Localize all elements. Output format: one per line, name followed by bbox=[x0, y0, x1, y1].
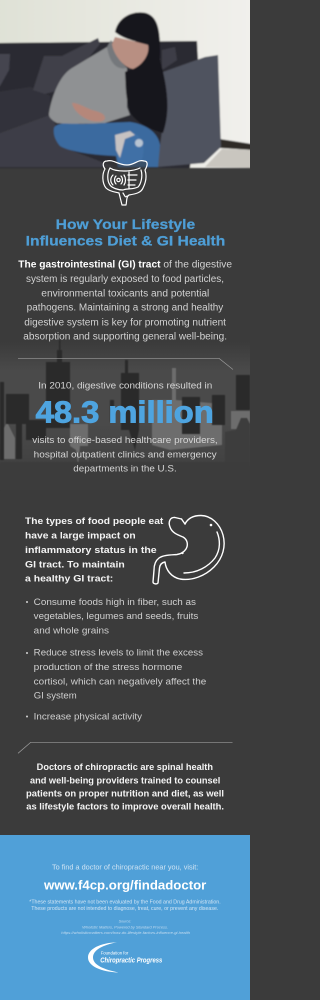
disclaimer bbox=[29, 899, 221, 912]
bullet: fiber bbox=[26, 597, 199, 636]
logo: Foundation for Chiropractic Progress bbox=[88, 942, 162, 972]
statistic block: departments in the U.S. bbox=[73, 464, 177, 475]
closing text block: patients on proper nutrition and diet, as well bbox=[26, 788, 224, 798]
lead text: food and inflammation: GI tract. To maintain bbox=[25, 559, 125, 570]
title bbox=[26, 216, 225, 249]
statistic block: hospital outpatient clinics and emergency bbox=[34, 449, 217, 460]
title: Influences Diet & GI Health bbox=[26, 233, 225, 249]
call to action text: To find a doctor of chiropractic near you, visit: bbox=[52, 863, 198, 872]
title: How Your Lifestyle bbox=[56, 216, 195, 232]
intro text block: environmental toxicants and potential bbox=[41, 288, 209, 299]
website url: www.f4cp.org/findadoctor bbox=[43, 877, 206, 892]
source bbox=[61, 920, 190, 935]
bullet list bbox=[26, 597, 206, 723]
lead text: food and inflammation bbox=[25, 516, 164, 585]
bullet: activity: Increase physical activity bbox=[34, 712, 142, 723]
statistic block: visits to office-based healthcare providers, bbox=[32, 435, 218, 446]
divider: lower bbox=[18, 742, 232, 753]
bullet: stress: GI system bbox=[34, 691, 77, 702]
closing text block: Doctors of chiropractic are spinal health bbox=[37, 762, 213, 772]
lead text: food and inflammation: a healthy GI tract: bbox=[25, 574, 113, 585]
intro text block: digestive system is key for promoting nutrient bbox=[24, 317, 226, 328]
bullet: stress bbox=[26, 648, 206, 702]
disclaimer: These products are not intended to diagnose, treat, cure, or prevent any disease. bbox=[31, 906, 218, 912]
bullet: stress: cortisol, which can negatively affect the bbox=[34, 676, 206, 687]
statistic block: In 2010, digestive conditions resulted in bbox=[38, 381, 212, 392]
bullet: fiber: vegetables, legumes and seeds, fruits bbox=[34, 611, 199, 622]
icon: intestines bbox=[103, 161, 147, 205]
bullet: stress: Reduce stress levels to limit the excess bbox=[34, 648, 203, 659]
logo: Foundation for Chiropractic Progress: Foundation for bbox=[101, 950, 129, 955]
icon: stomach bbox=[153, 516, 224, 584]
bullet: fiber: and whole grains bbox=[34, 625, 109, 636]
intro text block: The gastrointestinal (GI) tract of the digestive bbox=[18, 260, 233, 271]
bullet: stress: production of the stress hormone bbox=[34, 662, 182, 673]
infographic bbox=[0, 0, 250, 1000]
closing text block: as lifestyle factors to improve overall health. bbox=[26, 802, 224, 812]
closing text block: and well-being providers trained to counsel bbox=[30, 775, 220, 785]
source: Source: bbox=[119, 920, 131, 924]
closing text block bbox=[26, 762, 224, 812]
skyline illustration bbox=[0, 340, 250, 490]
statistic: 48.3 million: 48.3 million bbox=[36, 395, 214, 429]
photo: woman holding her stomach on a sofa bbox=[0, 0, 252, 168]
logo: Foundation for Chiropractic Progress: Chiropractic Progress bbox=[100, 956, 162, 965]
source: Wholistic Matters, Powered by Standard Process. bbox=[82, 925, 168, 929]
disclaimer: *These statements have not been evaluated by the Food and Drug Administration. bbox=[29, 899, 221, 905]
intro text block: system is regularly exposed to food particles, bbox=[26, 274, 224, 285]
intro text block: absorption and supporting general well-being. bbox=[23, 332, 227, 343]
panel: footer bbox=[0, 835, 250, 1000]
divider: upper bbox=[18, 358, 233, 370]
statistic block bbox=[32, 381, 218, 475]
lead text: food and inflammation: The types of food people eat bbox=[25, 516, 164, 527]
source: https://wholisticmatters.com/how-do-lifestyle-factors-influence-gi-health bbox=[61, 931, 190, 935]
panel: dark background bbox=[0, 167, 250, 835]
lead text: food and inflammation: inflammatory status in the bbox=[25, 545, 157, 556]
intro text block: pathogens. Maintaining a strong and healthy bbox=[27, 303, 223, 314]
bullet: fiber: Consume foods high in fiber, such as bbox=[34, 597, 196, 608]
lead text: food and inflammation: have a large impact on bbox=[25, 531, 136, 542]
intro text block bbox=[18, 260, 233, 343]
